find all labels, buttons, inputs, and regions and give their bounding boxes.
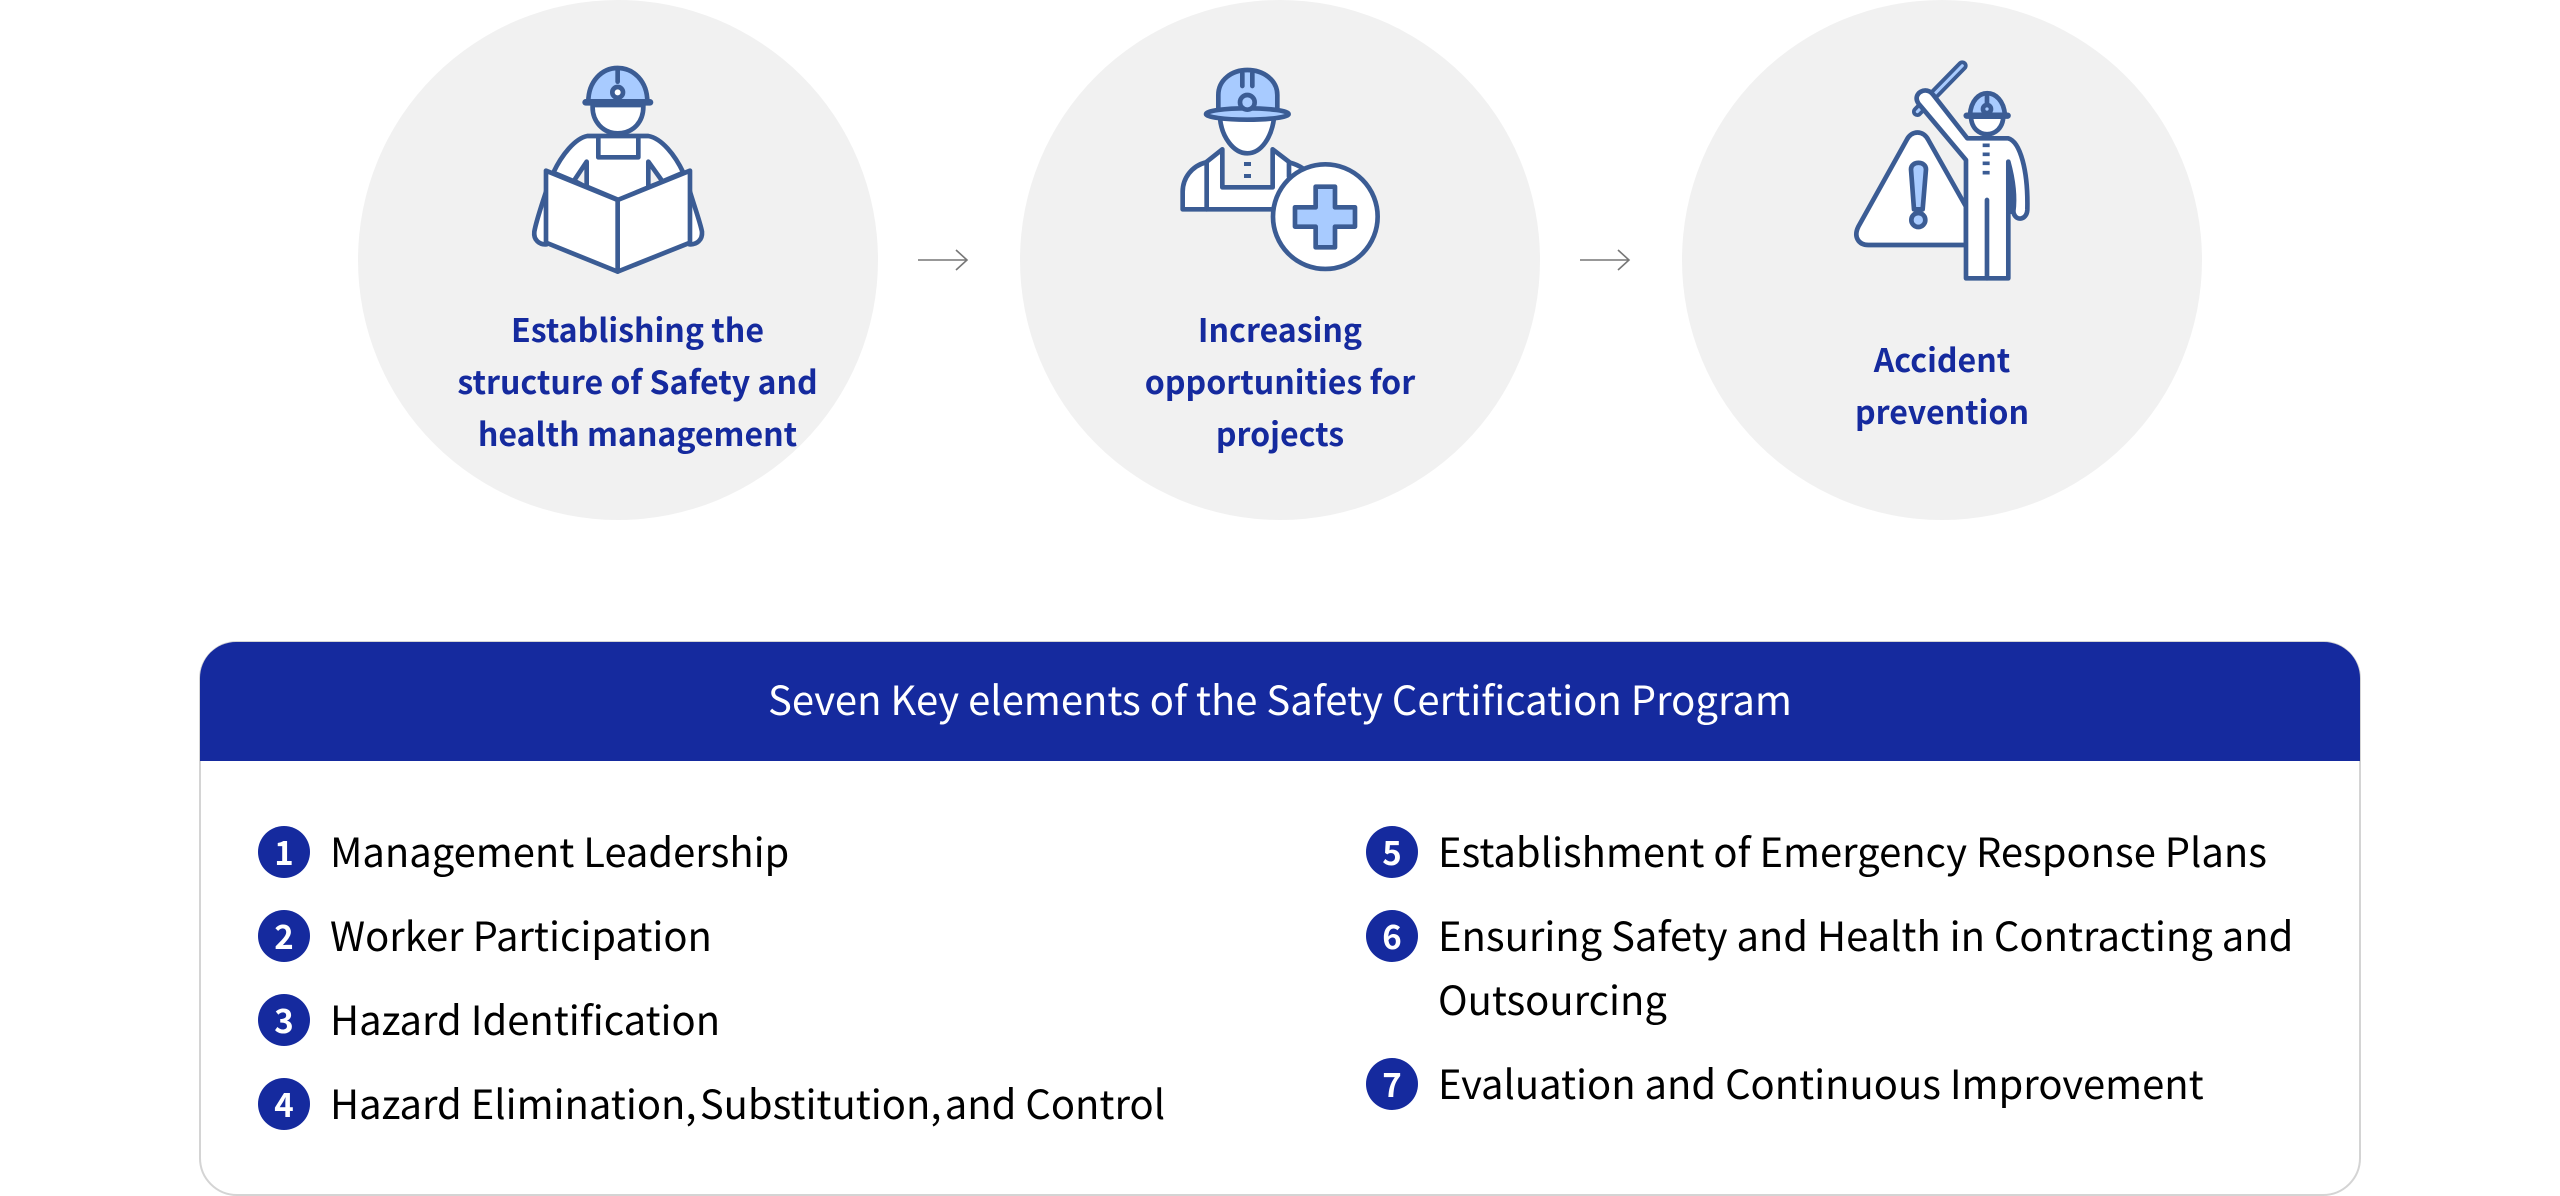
text: Hazard Elimination, Substitution, and Control [330,1073,1165,1131]
panel: establishing the structure [358,0,878,520]
text: 2 [274,911,294,959]
text: Establishment of Emergency Response Plans [1438,821,2267,879]
text: 6 [1382,911,1402,959]
icon: worker with medical cross [1180,68,1380,272]
heading: establishing the structure of safety and health management: health management [478,410,797,456]
text: Worker Participation [330,905,712,963]
list item 6 [1366,905,2293,1027]
heading: increasing opportunities for projects [1145,306,1416,456]
heading: accident prevention: Accident [1874,336,2010,382]
text: Hazard Identification [330,989,720,1047]
icon: worker reading a book [532,66,704,274]
heading: accident prevention [1855,336,2029,434]
heading: increasing opportunities for projects: projects [1216,410,1344,456]
arrow: step two to step three [1580,250,1630,270]
heading: establishing the structure of safety and health management [457,306,818,456]
text: 1 [274,827,294,875]
heading: establishing the structure of safety and health management: structure of Safety and [457,358,818,404]
list item 1 [258,821,789,879]
panel: increasing opportunities [1020,0,1540,520]
panel: accident prevention [1682,0,2202,520]
panel: seven key elements [199,641,2361,1196]
heading: increasing opportunities for projects: opportunities for [1145,358,1415,404]
icon: worker with warning sign [1854,60,2030,281]
text: Management Leadership [330,821,789,879]
heading: accident prevention: prevention [1855,388,2029,434]
text: Evaluation and Continuous Improvement [1438,1053,2204,1111]
heading: seven key elements title bar: Seven Key elements of the Safety Certification Program [768,669,1792,727]
list item 5 [1366,821,2267,879]
arrow: step one to step two [918,250,968,270]
list item 2 [258,905,712,963]
list item 3 [258,989,720,1047]
text: 7 [1382,1059,1402,1107]
text: 4 [274,1079,294,1127]
text: Outsourcing [1438,969,1667,1027]
list item 7 [1366,1053,2204,1111]
heading: increasing opportunities for projects: Increasing [1198,306,1362,352]
list item 4 [258,1073,1165,1131]
text: 5 [1382,827,1402,875]
heading: seven key elements title bar [200,642,2360,761]
heading: establishing the structure of safety and health management: Establishing the [511,306,764,352]
text: 3 [274,995,294,1043]
text: Ensuring Safety and Health in Contracting and [1438,905,2293,963]
